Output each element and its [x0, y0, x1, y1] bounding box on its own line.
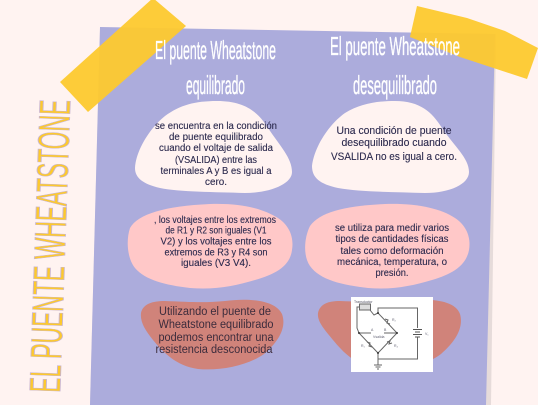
diagram: Wheatstone bridge circuit: R₁	[361, 344, 366, 348]
diagram: Wheatstone bridge circuit: V₁	[425, 332, 429, 336]
card: unbalanced definition: desequilibrado cuando	[342, 137, 446, 149]
heading: unbalanced bridge	[330, 31, 460, 100]
card: voltages: iguales (V3 V4).	[181, 258, 251, 269]
card: voltages: extremos de R3 y R4 son	[164, 248, 268, 258]
card: uses: tales como deformación	[340, 246, 444, 257]
heading: balanced bridge	[155, 35, 276, 100]
card: voltages: , los voltajes entre los extremos	[154, 215, 276, 226]
card: voltages: V2) y los voltajes entre los	[160, 236, 272, 248]
panel shadow	[90, 30, 496, 405]
card: uses: presión.	[376, 268, 408, 279]
text: El puente Wheatstone	[155, 35, 276, 65]
card: uses: mecánica, temperatura, o	[337, 257, 447, 268]
diagram: Wheatstone bridge circuit: R₂	[392, 318, 397, 322]
card: unbalanced definition: VSALIDA no es igual a cero.	[331, 151, 457, 163]
card: unbalanced definition: Una condición de puente	[336, 125, 452, 137]
tape: top right	[410, 6, 538, 79]
card: balanced definition: (VSALIDA) entre las	[175, 155, 257, 166]
diagram: Wheatstone bridge circuit	[351, 297, 433, 372]
diagram: Wheatstone bridge circuit: B	[384, 328, 387, 332]
card: balanced definition: terminales A y B es igual a	[160, 166, 272, 177]
heading: balanced bridge: equilibrado	[186, 70, 245, 100]
diagram: Wheatstone bridge circuit: Vsalida	[373, 335, 385, 339]
card: unknown resistance: resistencia desconocida	[156, 344, 273, 356]
card: balanced definition: cero.	[205, 177, 227, 188]
card: balanced definition	[135, 101, 292, 193]
card: unknown resistance: Wheatstone equilibrado	[158, 319, 274, 331]
card: uses	[305, 204, 469, 289]
card: circuit backdrop	[318, 300, 461, 369]
card: balanced definition: se encuentra en la condición	[155, 121, 277, 132]
diagram: Wheatstone bridge circuit: Transductor	[354, 300, 373, 304]
diagram: Wheatstone bridge circuit: R₄	[394, 344, 399, 348]
card: unbalanced definition	[312, 101, 469, 193]
card: unknown resistance: Utilizando el puente de	[159, 306, 271, 318]
card: balanced definition: cuando el voltaje de salida	[159, 143, 273, 154]
card: uses: tipos de cantidades físicas	[336, 234, 448, 245]
card: unknown resistance	[141, 300, 283, 369]
tape: top left	[60, 0, 186, 112]
card: voltages	[128, 204, 292, 289]
panel: lavender background	[90, 27, 495, 405]
card: uses: se utiliza para medir varios	[335, 223, 449, 234]
heading: unbalanced bridge: desequilibrado	[353, 70, 437, 100]
card: voltages: de R1 y R2 son iguales (V1	[166, 226, 267, 236]
card: unknown resistance: podemos encontrar una	[158, 332, 274, 344]
diagram: Wheatstone bridge circuit: A	[371, 328, 374, 332]
card: balanced definition: de puente equilibrado	[169, 132, 263, 143]
